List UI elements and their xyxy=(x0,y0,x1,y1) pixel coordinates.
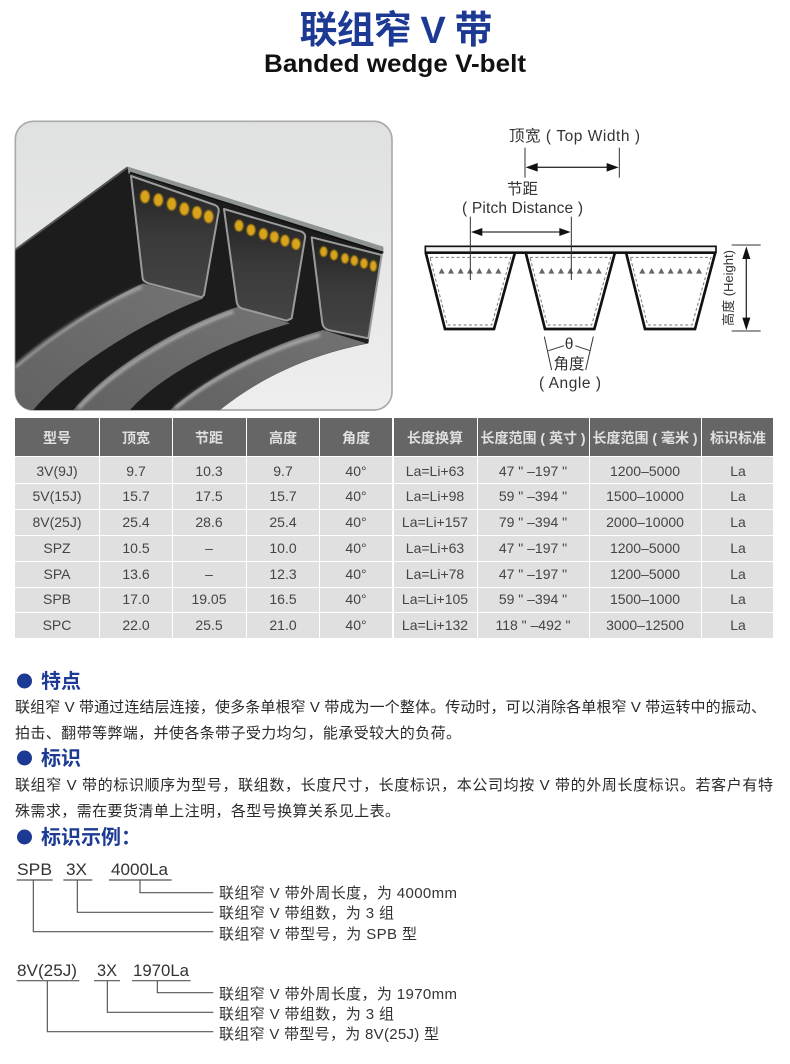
row: SPB: 17.0 xyxy=(122,591,150,607)
label: pitch distance: ( Pitch Distance ) xyxy=(462,200,583,217)
heading: features xyxy=(17,670,81,693)
label: angle: ( Angle ) xyxy=(539,375,601,392)
row: 8V(25J): 40° xyxy=(345,514,367,530)
heading: features: 特点 xyxy=(41,670,81,693)
row: SPC: La xyxy=(730,617,746,633)
example: 8V(25J) 3X 1970La: 3X xyxy=(97,962,117,980)
example: SPB 3X 4000La xyxy=(17,861,457,943)
belt cross-section drawing xyxy=(425,246,716,329)
row: SPC: 21.0 xyxy=(269,617,297,633)
row: 8V(25J): 25.4 xyxy=(122,514,150,530)
table: specifications xyxy=(15,418,773,638)
label: angle xyxy=(539,336,601,392)
example: SPB 3X 4000La: 3X xyxy=(66,861,87,879)
table header xyxy=(15,418,773,456)
text: features: 联组窄 V 带通过连结层连接，使多条单根窄 V 带成为一个整体。传动时，可以消除各单根窄 V 带运转中的振动、 xyxy=(15,698,766,716)
table header: 长度范围 ( 英寸 ) xyxy=(480,430,586,446)
row: SPZ: 1200–5000 xyxy=(610,540,680,556)
belt cross-sections xyxy=(131,176,382,338)
row: 3V(9J): 10.3 xyxy=(195,463,223,479)
row: 8V(25J): 8V(25J) xyxy=(32,514,82,530)
row: SPA: 40° xyxy=(345,566,367,582)
example: SPB 3X 4000La: 联组窄 V 带组数，为 3 组 xyxy=(219,904,394,922)
table body background xyxy=(15,457,773,638)
row: 5V(15J) xyxy=(32,488,746,504)
row: SPB: 59 " –394 " xyxy=(499,591,567,607)
row: SPA: 12.3 xyxy=(269,566,297,582)
row: 3V(9J): La=Li+63 xyxy=(406,463,464,479)
table header: 顶宽 xyxy=(122,430,150,446)
label: angle: θ xyxy=(565,336,573,353)
row: SPB: 40° xyxy=(345,591,367,607)
table header: 长度范围 ( 毫米 ) xyxy=(592,430,698,446)
row: SPB: La=Li+105 xyxy=(402,591,468,607)
row: SPZ xyxy=(43,540,746,556)
example: 8V(25J) 3X 1970La: 联组窄 V 带组数，为 3 组 xyxy=(219,1005,394,1023)
row: 8V(25J): La xyxy=(730,514,746,530)
row: 5V(15J): 59 " –394 " xyxy=(499,488,567,504)
table header: 长度换算 xyxy=(407,430,463,446)
row: SPC: 3000–12500 xyxy=(606,617,684,633)
row: SPZ: La xyxy=(730,540,746,556)
label: pitch distance: 节距 xyxy=(507,180,538,198)
row: SPA: – xyxy=(205,566,213,582)
panel: belt photo xyxy=(15,121,392,410)
row: 8V(25J): La=Li+157 xyxy=(402,514,468,530)
row: 8V(25J) xyxy=(32,514,746,530)
example: 8V(25J) 3X 1970La xyxy=(17,962,457,1043)
row: SPA: 47 " –197 " xyxy=(499,566,567,582)
row: SPA: 13.6 xyxy=(122,566,150,582)
text: features: 拍击、翻带等弊端，并使各条带子受力均匀，能承受较大的负荷。 xyxy=(15,724,461,742)
dimension arrows xyxy=(470,148,761,370)
row: 8V(25J): 2000–10000 xyxy=(606,514,684,530)
heading: marking: 标识 xyxy=(41,747,81,770)
example: SPB 3X 4000La: 4000La xyxy=(111,861,169,879)
row: SPA: La xyxy=(730,566,746,582)
row: 3V(9J): 40° xyxy=(345,463,367,479)
belt bands xyxy=(15,283,367,410)
text: marking: 联组窄 V 带的标识顺序为型号，联组数，长度尺寸，长度标识，本公司均按 V 带的外周长度标识。若客户有特 xyxy=(15,776,773,794)
row: 8V(25J): 79 " –394 " xyxy=(499,514,567,530)
row: 3V(9J): 1200–5000 xyxy=(610,463,680,479)
row: SPA: La=Li+78 xyxy=(406,566,464,582)
row: SPB: La xyxy=(730,591,746,607)
text: marking: 殊需求，需在要货清单上注明，各型号换算关系见上表。 xyxy=(15,802,400,820)
text: marking xyxy=(15,776,773,820)
row: SPB: 1500–1000 xyxy=(610,591,680,607)
row: SPB xyxy=(43,591,746,607)
row: SPC: 25.5 xyxy=(195,617,223,633)
row: SPZ: 10.0 xyxy=(269,540,297,556)
label: height: 高度 (Height) xyxy=(721,250,736,326)
table header: 高度 xyxy=(269,430,297,446)
example: SPB 3X 4000La: SPB xyxy=(17,861,52,879)
row: 3V(9J): 3V(9J) xyxy=(36,463,78,479)
row: SPZ: La=Li+63 xyxy=(406,540,464,556)
row: 5V(15J): La xyxy=(730,488,746,504)
row: 8V(25J): 25.4 xyxy=(269,514,297,530)
text: features xyxy=(15,698,766,742)
row: SPC: La=Li+132 xyxy=(402,617,468,633)
row: 5V(15J): 15.7 xyxy=(122,488,150,504)
row: SPZ: – xyxy=(205,540,213,556)
table header: 节距 xyxy=(195,430,223,446)
example: 8V(25J) 3X 1970La: 8V(25J) xyxy=(17,962,77,980)
row: 3V(9J): 9.7 xyxy=(273,463,293,479)
table header: 角度 xyxy=(342,430,370,446)
row: 5V(15J): 5V(15J) xyxy=(32,488,82,504)
example: SPB 3X 4000La: 联组窄 V 带外周长度，为 4000mm xyxy=(219,884,457,902)
table header: 标识标准 xyxy=(710,430,766,446)
row: SPC: 40° xyxy=(345,617,367,633)
label: top width: 顶宽 ( Top Width ) xyxy=(509,127,640,145)
row: SPA: 1200–5000 xyxy=(610,566,680,582)
label: angle: 角度 xyxy=(553,355,585,373)
label: pitch distance xyxy=(462,180,583,217)
row: 3V(9J): 47 " –197 " xyxy=(499,463,567,479)
row: 3V(9J) xyxy=(36,463,746,479)
row: SPC: 118 " –492 " xyxy=(495,617,571,633)
row: SPC: SPC xyxy=(43,617,71,633)
row: SPA xyxy=(44,566,746,582)
row: SPZ: 47 " –197 " xyxy=(499,540,567,556)
row: 3V(9J): La xyxy=(730,463,746,479)
row: 3V(9J): 9.7 xyxy=(126,463,146,479)
row: SPB: 16.5 xyxy=(269,591,297,607)
example: 8V(25J) 3X 1970La: 联组窄 V 带外周长度，为 1970mm xyxy=(219,985,457,1003)
subtitle: Banded wedge V-belt xyxy=(264,50,527,78)
example: 8V(25J) 3X 1970La: 1970La xyxy=(133,962,190,980)
row: SPZ: SPZ xyxy=(43,540,71,556)
row: SPB: 19.05 xyxy=(191,591,227,607)
example: 8V(25J) 3X 1970La: 联组窄 V 带型号，为 8V(25J) 型 xyxy=(219,1025,439,1043)
row: 5V(15J): La=Li+98 xyxy=(406,488,464,504)
row: 5V(15J): 17.5 xyxy=(195,488,223,504)
row: 8V(25J): 28.6 xyxy=(195,514,223,530)
row: SPA: SPA xyxy=(44,566,71,582)
heading: marking examples: 标识示例： xyxy=(41,826,141,849)
row: SPZ: 40° xyxy=(345,540,367,556)
panel: belt dimension diagram xyxy=(425,127,761,392)
row: SPB: SPB xyxy=(43,591,71,607)
row: SPC: 22.0 xyxy=(122,617,150,633)
title: 联组窄 V 带 xyxy=(300,10,492,52)
row: SPC xyxy=(43,617,746,633)
gold cords xyxy=(140,190,377,271)
heading: marking xyxy=(17,747,81,770)
table header: 型号 xyxy=(43,430,71,446)
row: SPZ: 10.5 xyxy=(122,540,150,556)
row: 5V(15J): 1500–10000 xyxy=(606,488,684,504)
row: 5V(15J): 15.7 xyxy=(269,488,297,504)
example: SPB 3X 4000La: 联组窄 V 带型号，为 SPB 型 xyxy=(219,925,417,943)
row: 5V(15J): 40° xyxy=(345,488,367,504)
